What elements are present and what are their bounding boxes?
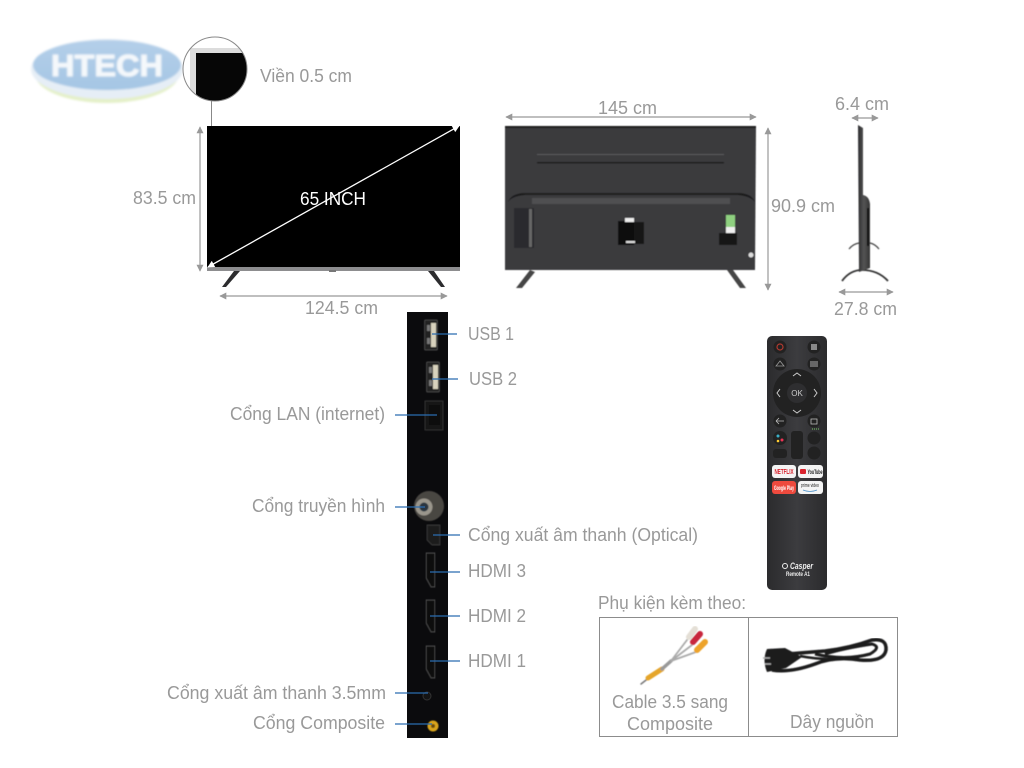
icon: power cord (763, 640, 886, 672)
icon: bezel magnifier (182, 36, 248, 126)
icon: composite cable (641, 629, 705, 684)
remote: app buttons: Google Play (774, 486, 794, 492)
label: composite: Cổng Composite (253, 713, 385, 733)
remote: lower buttons (773, 414, 820, 460)
label: antenna: Cổng truyền hình (252, 496, 385, 516)
remote: d-pad (773, 369, 821, 417)
remote: top buttons (774, 340, 820, 370)
arrow: depth (852, 117, 878, 119)
leader lines (395, 334, 460, 724)
arrow: front width (220, 295, 447, 297)
port: USB 1 (424, 320, 438, 350)
label: HDMI 1: HDMI 1 (468, 651, 526, 671)
heading: accessories: Phụ kiện kèm theo: (598, 593, 746, 613)
panel: ports (407, 312, 448, 738)
label: bezel size: Viền 0.5 cm (260, 66, 352, 86)
panel: accessories (600, 617, 898, 737)
arrow: back width (506, 116, 756, 118)
label: screen size: 65 INCH (300, 189, 366, 209)
port: LAN (425, 401, 443, 430)
remote: brand: Casper (790, 561, 813, 571)
label: LAN: Cổng LAN (internet) (230, 404, 385, 424)
remote: brand: Remote A1 (786, 572, 811, 578)
arrow: front height (199, 127, 201, 271)
diagonal arrow (208, 126, 459, 267)
label: power cord: Dây nguồn (790, 712, 874, 732)
remote: brand (782, 561, 813, 578)
back view of TV (505, 126, 756, 288)
remote: app buttons (772, 465, 823, 494)
logo: HTECH: HTECH (51, 48, 163, 83)
remote control (767, 336, 827, 590)
label: cable: Cable 3.5 sang (612, 692, 728, 712)
label: HDMI 3: HDMI 3 (468, 561, 526, 581)
label: optical: Cổng xuất âm thanh (Optical) (468, 525, 698, 545)
port: composite (428, 720, 438, 732)
remote: app buttons: prime video (801, 483, 819, 489)
port: optical (427, 525, 440, 545)
port: HDMI 1 (426, 646, 435, 678)
label: HDMI 2: HDMI 2 (468, 606, 526, 626)
port: antenna (414, 491, 444, 521)
remote: app buttons: YouTube (808, 470, 823, 476)
label: stand depth: 27.8 cm (834, 299, 897, 319)
port: HDMI 2 (426, 600, 435, 632)
label: front width: 124.5 cm (305, 298, 378, 318)
label: USB 2: USB 2 (469, 369, 517, 389)
remote: d-pad: OK (791, 389, 803, 398)
arrow: back height (767, 128, 769, 290)
port: 3.5mm jack (423, 692, 431, 700)
label: front height: 83.5 cm (133, 188, 196, 208)
remote: app buttons: NETFLIX (774, 469, 794, 476)
front view of TV (207, 126, 460, 287)
port: USB 2 (426, 362, 440, 392)
label: back width: 145 cm (598, 98, 657, 118)
port: HDMI 3 (426, 553, 435, 587)
label: composite accessory: Composite (627, 714, 713, 734)
arrow: stand depth (839, 291, 893, 293)
logo: HTECH (31, 39, 183, 103)
label: depth: 6.4 cm (835, 94, 889, 114)
label: 3.5mm: Cổng xuất âm thanh 3.5mm (167, 683, 386, 703)
label: USB 1: USB 1 (468, 324, 514, 344)
side view of TV (842, 125, 888, 281)
label: back height: 90.9 cm (771, 196, 835, 216)
